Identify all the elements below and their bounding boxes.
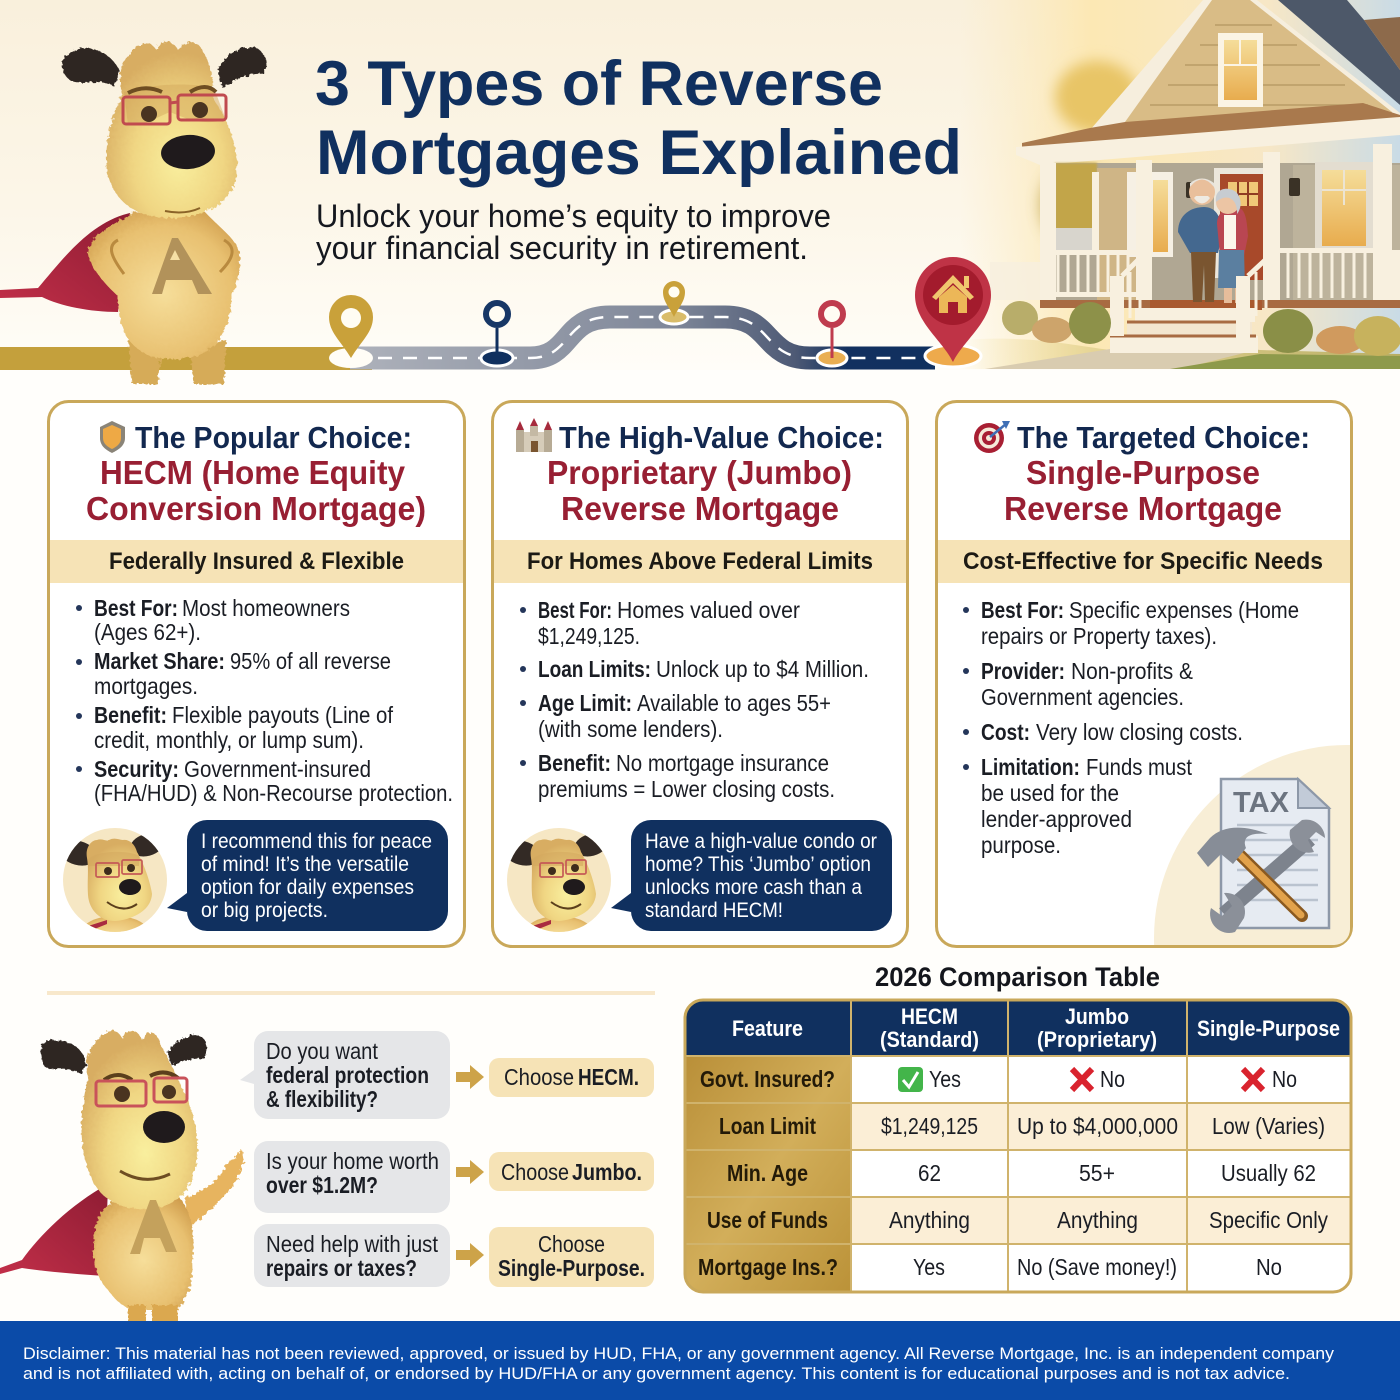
heading: Reverse Mortgage xyxy=(561,490,839,527)
header row: (Proprietary) xyxy=(1037,1027,1157,1052)
bullet list: Best For: xyxy=(538,597,612,623)
bullet list: Available to ages 55+ xyxy=(637,690,831,716)
bullet list: lender-approved xyxy=(981,806,1132,832)
question bubble 1: federal protection xyxy=(266,1062,429,1088)
speech bubble: or big projects. xyxy=(201,899,328,922)
arrow 2 xyxy=(456,1160,484,1184)
title: Mortgages Explained xyxy=(316,118,962,188)
bullet list: Government agencies. xyxy=(981,684,1184,710)
icon: castle xyxy=(516,418,552,452)
bullet list: Market Share: xyxy=(94,648,225,674)
map pin: gold midpoint xyxy=(660,281,688,324)
journey road xyxy=(350,317,935,358)
bullet list: premiums = Lower closing costs. xyxy=(538,776,835,802)
row: Use of Funds: Use of Funds xyxy=(707,1207,828,1233)
row: Mortgage Ins.: No xyxy=(1256,1254,1282,1280)
row: Min. Age: Min. Age xyxy=(727,1160,808,1186)
heading: Reverse Mortgage xyxy=(1004,490,1282,527)
bullet list: Benefit: xyxy=(538,750,611,776)
mascot: pointing dog with cape xyxy=(0,1031,244,1322)
question bubble 2: Is your home worth xyxy=(266,1148,439,1174)
mascot avatar xyxy=(63,828,167,932)
row: Mortgage Ins. xyxy=(698,1254,1282,1280)
bullet list xyxy=(520,597,869,802)
subtitle xyxy=(316,198,831,266)
speech bubble xyxy=(167,820,448,931)
subheading band: Federally Insured & Flexible xyxy=(109,548,404,575)
bullet list: Homes valued over xyxy=(617,597,800,623)
bullet list: purpose. xyxy=(981,832,1061,858)
question bubble 1 xyxy=(240,1031,450,1119)
row: Mortgage Ins.: No (Save money!) xyxy=(1017,1254,1177,1280)
row: Loan Limit: Low (Varies) xyxy=(1212,1113,1325,1139)
speech bubble: I recommend this for peace xyxy=(201,830,432,853)
speech bubble: option for daily expenses xyxy=(201,876,414,899)
row: Govt. Insured: Govt. Insured? xyxy=(700,1066,835,1092)
tax and tools illustration xyxy=(1154,745,1350,945)
footer disclaimer: and is not affiliated with, acting on behalf of, or endorsed by HUD/FHA or any government agency. This content is for educational purposes and is not tax advice. xyxy=(23,1364,1290,1383)
row: Min. Age: 62 xyxy=(918,1160,941,1186)
bullet list: Specific expenses (Home xyxy=(1069,597,1299,623)
subtitle: your financial security in retirement. xyxy=(316,230,808,266)
bullet list: Age Limit: xyxy=(538,690,632,716)
question bubble 3: repairs or taxes? xyxy=(266,1255,417,1281)
speech bubble: unlocks more cash than a xyxy=(645,876,862,899)
subtitle: Unlock your home’s equity to improve xyxy=(316,198,831,234)
panel: Jumbo card xyxy=(492,402,908,950)
bullet list xyxy=(963,597,1299,858)
mascot: hero dog with cape xyxy=(0,42,266,384)
question bubble 1: & flexibility? xyxy=(266,1086,378,1112)
heading: The Targeted Choice: xyxy=(1017,420,1310,455)
question bubble 3: Need help with just xyxy=(266,1231,439,1257)
header row: HECM xyxy=(901,1004,958,1029)
bullet list: 95% of all reverse xyxy=(230,648,391,674)
row: Govt. Insured: Yes xyxy=(929,1066,961,1092)
speech bubble: Have a high-value condo or xyxy=(645,830,877,853)
speech bubble: standard HECM! xyxy=(645,899,783,922)
bullet list: $1,249,125. xyxy=(538,623,640,649)
bullet list: (Ages 62+). xyxy=(94,619,201,645)
porch steps xyxy=(1110,250,1276,353)
bullet list: Security: xyxy=(94,756,179,782)
heading: Single-Purpose xyxy=(1026,454,1260,491)
arrow 3 xyxy=(456,1243,484,1267)
row: Loan Limit: Up to $4,000,000 xyxy=(1017,1113,1178,1139)
bullet list: No mortgage insurance xyxy=(616,750,829,776)
row: Loan Limit: $1,249,125 xyxy=(881,1113,978,1139)
row: Mortgage Ins.: Mortgage Ins.? xyxy=(698,1254,838,1280)
row: Govt. Insured: No xyxy=(1100,1066,1125,1092)
question bubble 2: over $1.2M? xyxy=(266,1172,378,1198)
bullet list: credit, monthly, or lump sum). xyxy=(94,727,364,753)
bullet list: Flexible payouts (Line of xyxy=(172,702,394,728)
question bubble 1: Do you want xyxy=(266,1038,379,1064)
answer: HECM: Choose xyxy=(504,1064,574,1090)
row: Govt. Insured: No xyxy=(1272,1066,1297,1092)
subheading band: For Homes Above Federal Limits xyxy=(527,548,873,575)
heading: The Popular Choice: xyxy=(135,420,412,455)
bullet list: Non-profits & xyxy=(1071,658,1193,684)
speech bubble: home? This ‘Jumbo’ option xyxy=(645,853,871,876)
bullet list: (FHA/HUD) & Non-Recourse protection. xyxy=(94,780,453,806)
house illustration xyxy=(960,0,1400,369)
bullet list: Funds must xyxy=(1086,754,1193,780)
tax and tools illustration: TAX xyxy=(1233,787,1290,819)
panel: HECM card xyxy=(48,402,464,950)
heading xyxy=(547,420,884,527)
row: Govt. Insured xyxy=(700,1066,1297,1092)
bullet list: mortgages. xyxy=(94,673,198,699)
mascot avatar xyxy=(507,828,611,932)
header row: (Standard) xyxy=(880,1027,979,1052)
bullet list: (with some lenders). xyxy=(538,716,723,742)
row: Use of Funds: Specific Only xyxy=(1209,1207,1328,1233)
decision flow xyxy=(240,1031,654,1287)
lawn and path xyxy=(960,339,1400,369)
subheading band: Cost-Effective for Specific Needs xyxy=(963,548,1323,575)
bullet list xyxy=(76,595,453,806)
header row xyxy=(732,1004,1340,1052)
heading xyxy=(1004,420,1310,527)
footer disclaimer: Disclaimer: This material has not been reviewed, approved, or issued by HUD, FHA, or any government agency. All Reverse Mortgage, Inc. is an independent company xyxy=(23,1344,1335,1363)
answer: Jumbo: Jumbo. xyxy=(572,1159,642,1185)
comparison table xyxy=(685,1000,1351,1292)
title: 3 Types of Reverse xyxy=(315,49,883,119)
bullet list: Limitation: xyxy=(981,754,1080,780)
bullet list: Provider: xyxy=(981,658,1065,684)
map pin: home destination xyxy=(915,257,991,367)
header row: Single-Purpose xyxy=(1197,1016,1340,1041)
bullet list: Very low closing costs. xyxy=(1036,719,1243,745)
answer: HECM xyxy=(489,1058,654,1097)
answer: Jumbo xyxy=(489,1152,654,1191)
row: Min. Age: 55+ xyxy=(1079,1160,1115,1186)
footer disclaimer xyxy=(0,1321,1400,1400)
shrubs and flowers xyxy=(1002,301,1400,356)
header row: Feature xyxy=(732,1016,803,1041)
row: Use of Funds xyxy=(707,1207,1328,1233)
heading: Conversion Mortgage) xyxy=(86,490,426,527)
map pin: red xyxy=(817,303,847,366)
icon: target xyxy=(974,421,1010,453)
row: Min. Age: Usually 62 xyxy=(1221,1160,1316,1186)
row: Use of Funds: Anything xyxy=(1057,1207,1138,1233)
heading: HECM (Home Equity xyxy=(100,454,406,491)
icon: shield xyxy=(100,421,125,453)
header banner xyxy=(0,0,1400,384)
gold baseline strip xyxy=(0,347,372,370)
answer: Single-Purpose xyxy=(489,1227,654,1287)
title xyxy=(315,49,962,188)
map pin: navy xyxy=(481,303,513,366)
heading: The High-Value Choice: xyxy=(559,420,884,455)
row: Loan Limit xyxy=(719,1113,1325,1139)
seniors couple xyxy=(1178,178,1248,303)
bullet list: Loan Limits: xyxy=(538,656,651,682)
subheading band xyxy=(938,540,1350,583)
row: Mortgage Ins.: Yes xyxy=(913,1254,945,1280)
heading xyxy=(86,420,426,527)
row: Use of Funds: Anything xyxy=(889,1207,970,1233)
bullet list: Best For: xyxy=(94,595,178,621)
answer: Jumbo: Choose xyxy=(501,1159,569,1185)
bullet list: Best For: xyxy=(981,597,1064,623)
bullet list: be used for the xyxy=(981,780,1119,806)
bullet list: repairs or Property taxes). xyxy=(981,623,1217,649)
heading: Proprietary (Jumbo) xyxy=(547,454,852,491)
answer: HECM: HECM. xyxy=(578,1064,639,1090)
row: Loan Limit: Loan Limit xyxy=(719,1113,816,1139)
panel: Single-Purpose card xyxy=(935,400,1353,948)
header row: Jumbo xyxy=(1065,1004,1129,1029)
row: Min. Age xyxy=(727,1160,1316,1186)
subheading band xyxy=(494,540,906,583)
header background xyxy=(0,0,1400,370)
map pin: gold start xyxy=(329,295,373,368)
bullet list: Government-insured xyxy=(184,756,371,782)
answer: Single-Purpose: Single-Purpose. xyxy=(498,1255,645,1281)
bullet list: Cost: xyxy=(981,719,1030,745)
bullet list: Benefit: xyxy=(94,702,167,728)
arrow 1 xyxy=(456,1065,484,1089)
subheading band xyxy=(50,540,463,583)
speech bubble: of mind! It’s the versatile xyxy=(201,853,409,876)
table title: 2026 Comparison Table xyxy=(875,962,1160,992)
speech bubble xyxy=(611,820,892,931)
answer: Single-Purpose: Choose xyxy=(538,1231,605,1257)
bullet list: Unlock up to $4 Million. xyxy=(656,656,869,682)
bullet list: Most homeowners xyxy=(182,595,350,621)
question bubble 2 xyxy=(254,1141,450,1213)
question bubble 3 xyxy=(254,1224,450,1287)
